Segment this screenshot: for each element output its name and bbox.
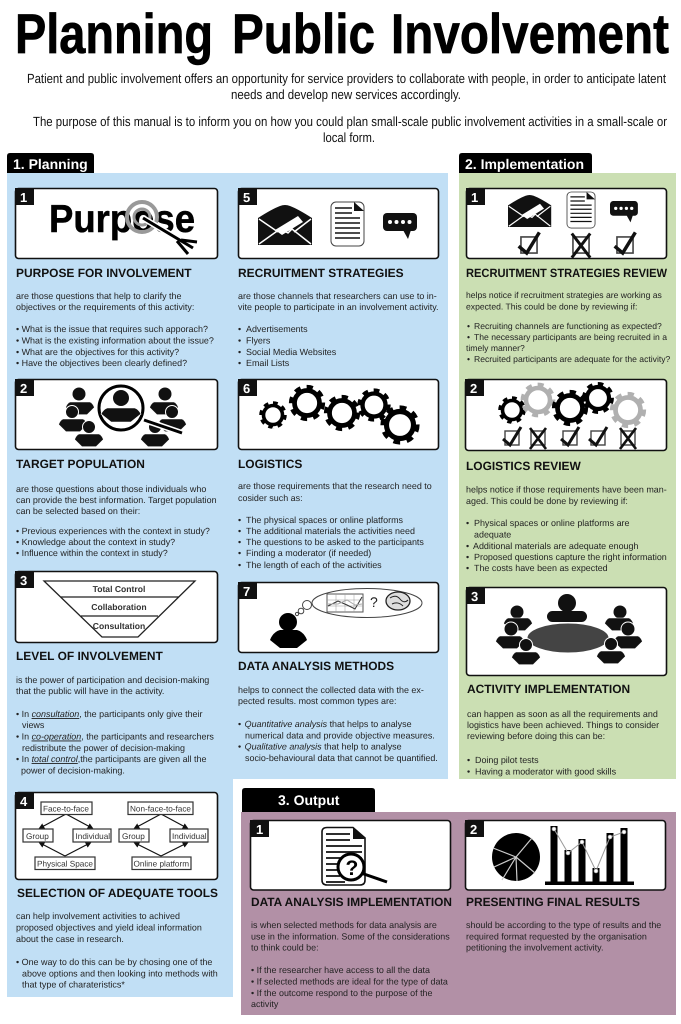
heading tab: 1. Planning <box>7 153 94 173</box>
section: data analysis methods: DATA ANALYSIS METHODS <box>238 659 394 673</box>
section: logistics review: Additional materials are adequate enough <box>473 541 638 551</box>
icon: people under magnifier <box>59 386 186 447</box>
heading tab: 3. Output <box>242 788 375 812</box>
section: target population: TARGET POPULATION <box>16 457 145 471</box>
intro text: needs and develop new services accordingly. <box>231 87 461 102</box>
section: presenting final results <box>465 820 666 952</box>
icon: recruitment channels with check marks <box>508 192 638 258</box>
diagram: tool options: Online platform <box>134 860 189 868</box>
icon: purpose target and dart: Purpose <box>49 198 195 241</box>
section: level of involvement: • In co-operation, the participants and researchers <box>16 732 214 742</box>
section: recruitment strategies: Advertisements <box>246 324 308 334</box>
section: data analysis methods: socio-behavioural data that cannot be quantified. <box>245 753 438 763</box>
section: recruitment strategies review: expected. This could be done by reviewing if: <box>466 302 637 312</box>
heading tab: 3. Output: 3. Output <box>278 792 340 808</box>
section: recruitment strategies: Email Lists <box>246 358 290 368</box>
section: recruitment strategies review: Recruited participants are adequate for the activity? <box>474 354 671 364</box>
title: Public <box>232 2 375 65</box>
section: logistics review: LOGISTICS REVIEW <box>466 459 581 473</box>
icon: involvement funnel: Total Control <box>93 584 145 594</box>
section: selection of adequate tools: above options and then looking into methods with <box>22 968 218 978</box>
icon: bar and line chart <box>545 826 634 885</box>
section: data analysis implementation: • If the researcher have access to all the data <box>251 965 430 975</box>
section: data analysis implementation: • If selected methods are ideal for the type of data <box>251 976 448 986</box>
section: recruitment strategies review: 1 <box>471 190 478 205</box>
section: activity implementation: Doing pilot tests <box>475 755 539 765</box>
section: logistics review: Proposed questions capture the right information <box>474 552 667 562</box>
section: activity implementation: reviewing before doing this can be: <box>467 731 605 741</box>
intro text: local form. <box>323 130 375 145</box>
section: level of involvement: • In total control,the participants are given all the <box>16 754 206 764</box>
section: recruitment strategies: Social Media Websites <box>246 347 337 357</box>
section: target population: can provide the best information. Target population <box>16 495 217 505</box>
section: logistics review: • <box>466 541 469 551</box>
section: logistics: • <box>238 526 241 536</box>
section: purpose for involvement <box>15 188 218 368</box>
icon: envelope <box>258 205 312 245</box>
section: activity implementation: Having a moderator with good skills <box>475 766 617 776</box>
section: recruitment strategies: vite people to participate in an involvement activity. <box>238 302 439 312</box>
section: target population: can be selected based on their: <box>16 506 140 516</box>
section: recruitment strategies review: Recruiting channels are functioning as expected? <box>474 321 662 331</box>
panel: planning background <box>7 173 448 997</box>
section: recruitment strategies review: The necessary participants are being recruited in a <box>474 332 667 342</box>
section: recruitment strategies: are those channels that researchers can use to in- <box>238 291 437 301</box>
title: Planning <box>15 2 213 65</box>
section: activity implementation: • <box>467 766 470 776</box>
section: target population: • Influence within the context in study? <box>16 548 168 558</box>
icon: document with magnifier <box>322 828 387 885</box>
section: recruitment strategies: 5 <box>243 190 250 205</box>
section: logistics: The physical spaces or online platforms <box>246 515 404 525</box>
section: activity implementation <box>466 587 666 776</box>
section: presenting final results: required format requested by the organisation <box>466 932 647 942</box>
section: logistics: The length of each of the activities <box>246 560 382 570</box>
section: recruitment strategies review: • <box>467 354 470 364</box>
section: purpose for involvement: • What are the objectives for this activity? <box>16 347 179 357</box>
diagram: tool options: Physical Space <box>37 860 93 868</box>
section: purpose for involvement: objectives or the requirements of this activity: <box>16 302 194 312</box>
section: recruitment strategies review: • <box>467 332 470 342</box>
section: data analysis implementation: use in the information. Some of the considerations <box>251 932 450 942</box>
section: selection of adequate tools <box>15 792 218 990</box>
section: presenting final results: should be according to the type of results and the <box>466 920 661 930</box>
heading tab: 2. Implementation: 2. Implementation <box>465 156 584 172</box>
section: presenting final results: petitioning the involvement activity. <box>466 942 603 952</box>
diagram: tool options: Group <box>26 832 49 841</box>
section: data analysis methods: helps to connect the collected data with the ex- <box>238 685 424 695</box>
diagram: tool options: Individual <box>76 832 110 841</box>
section: logistics: • <box>238 515 241 525</box>
icon: gears <box>261 388 417 442</box>
diagram: tool options: Non-face-to-face <box>130 804 191 814</box>
section: target population: are those questions about those individuals who <box>16 484 206 494</box>
section: logistics: The additional materials the activities need <box>246 526 415 536</box>
section: activity implementation: • <box>467 755 470 765</box>
section: selection of adequate tools: proposed objectives and yield ideal information <box>16 922 202 932</box>
section: logistics review: • <box>466 552 469 562</box>
section: recruitment strategies review: • <box>467 321 470 331</box>
section: activity implementation: can happen as soon as all the requirements and <box>467 709 658 719</box>
icon: flyer document <box>331 202 364 246</box>
section: data analysis implementation: DATA ANALYSIS IMPLEMENTATION <box>251 895 452 909</box>
section: data analysis methods <box>238 582 438 763</box>
section: recruitment strategies: • <box>238 347 241 357</box>
section: logistics: • <box>238 560 241 570</box>
section: purpose for involvement: • Have the objectives been clearly defined? <box>16 358 187 368</box>
section: recruitment strategies: • <box>238 336 241 346</box>
section: recruitment strategies: RECRUITMENT STRATEGIES <box>238 266 404 280</box>
section: logistics: Finding a moderator (if needed) <box>246 548 371 558</box>
section: logistics review: 2 <box>470 381 477 396</box>
section: activity implementation: logistics have been achieved. Things to consider <box>467 720 659 730</box>
section: selection of adequate tools: 4 <box>20 794 28 809</box>
section: logistics review: adequate <box>474 530 511 540</box>
icon: people around table <box>496 594 642 665</box>
section: data analysis methods: pected results. most common types are: <box>238 696 396 706</box>
section: selection of adequate tools: can help involvement activities to achived <box>16 911 180 921</box>
section: data analysis implementation: is when selected methods for data analysis are <box>251 920 437 930</box>
section: logistics: The questions to be asked to the participants <box>246 537 424 547</box>
icon: chat bubble <box>383 213 417 239</box>
section: logistics review <box>465 379 667 573</box>
section: recruitment strategies review: timely manner? <box>466 343 525 353</box>
diagram: tool options: Group <box>122 832 145 841</box>
section: recruitment strategies: Flyers <box>246 336 271 346</box>
section: activity implementation: ACTIVITY IMPLEMENTATION <box>467 682 630 696</box>
section: logistics review: The costs have been as expected <box>474 563 608 573</box>
section: logistics review: Physical spaces or online platforms are <box>474 518 630 528</box>
section: selection of adequate tools: SELECTION OF ADEQUATE TOOLS <box>17 886 218 900</box>
section: recruitment strategies review: helps notice if recruitment strategies are working as <box>466 290 662 300</box>
section: recruitment strategies: • <box>238 358 241 368</box>
section: target population <box>15 379 218 558</box>
intro text <box>27 71 667 145</box>
section: data analysis implementation <box>250 820 452 1009</box>
section: recruitment strategies: • <box>238 324 241 334</box>
icon: pie chart <box>492 833 540 881</box>
section: data analysis methods: • Quantitative analysis that helps to analyse <box>238 719 412 729</box>
section: logistics: • <box>238 548 241 558</box>
section: level of involvement: views <box>22 720 45 730</box>
section: data analysis implementation: activity <box>251 999 279 1009</box>
section: target population: • Previous experiences with the context in study? <box>16 526 210 536</box>
diagram: tool options <box>23 802 208 870</box>
section: logistics review: • <box>466 518 469 528</box>
section: logistics <box>238 379 438 570</box>
section: recruitment strategies review: RECRUITMENT STRATEGIES REVIEW <box>466 266 668 280</box>
diagram: tool options: Face-to-face <box>43 804 89 814</box>
panel: output background <box>241 812 676 1015</box>
section: data analysis implementation: to think could be: <box>251 942 319 952</box>
section: level of involvement: • In consultation, the participants only give their <box>16 709 202 719</box>
section: purpose for involvement: • What is the existing information about the issue? <box>16 336 214 346</box>
section: data analysis implementation: • If the outcome respond to the purpose of the <box>251 988 433 998</box>
section: level of involvement: LEVEL OF INVOLVEMENT <box>16 649 164 663</box>
icon: involvement funnel: Collaboration <box>91 602 147 612</box>
icon: gears with check marks <box>500 384 643 449</box>
section: recruitment strategies <box>238 188 439 368</box>
section: level of involvement <box>15 571 218 776</box>
panel: implementation background <box>459 173 676 779</box>
section: presenting final results: PRESENTING FINAL RESULTS <box>466 895 640 909</box>
icon: involvement funnel <box>44 581 195 637</box>
section: activity implementation: 3 <box>471 589 478 604</box>
section: logistics: 6 <box>243 381 250 396</box>
section: selection of adequate tools: about the case in research. <box>16 934 124 944</box>
section: presenting final results: 2 <box>470 822 477 837</box>
section: logistics: • <box>238 537 241 547</box>
section: logistics review: helps notice if those requirements have been man- <box>466 484 667 494</box>
section: logistics: cosider such as: <box>238 493 303 503</box>
section: logistics: LOGISTICS <box>238 457 302 471</box>
section: recruitment strategies review <box>466 188 671 364</box>
section: level of involvement: is the power of participation and decision-making <box>16 675 209 685</box>
section: level of involvement: that the public will have in the activity. <box>16 686 164 696</box>
section: selection of adequate tools: that type of charateristics* <box>22 980 125 990</box>
section: target population: • Knowledge about the context in study? <box>16 537 175 547</box>
section: data analysis implementation: 1 <box>256 822 263 837</box>
section: data analysis methods: 7 <box>243 584 250 599</box>
section: data analysis methods: numerical data and provide objective measures. <box>245 730 435 740</box>
section: logistics review: • <box>466 563 469 573</box>
section: level of involvement: redistribute the power of decision-making <box>22 743 185 753</box>
icon: thinking person with chart and brain: ? <box>370 594 378 610</box>
section: selection of adequate tools: • One way to do this can be by chosing one of the <box>16 957 212 967</box>
section: target population: 2 <box>20 381 27 396</box>
section: purpose for involvement: • What is the issue that requires such apporach? <box>16 324 208 334</box>
section: data analysis methods: • Qualitative analysis that help to analyse <box>238 742 402 752</box>
section: logistics review: aged. This could be done by reviewing if: <box>466 496 628 506</box>
heading tab: 1. Planning: 1. Planning <box>13 156 88 172</box>
section: level of involvement: 3 <box>20 573 27 588</box>
section: purpose for involvement: 1 <box>20 190 27 205</box>
section: purpose for involvement: PURPOSE FOR INVOLVEMENT <box>16 266 192 280</box>
icon: involvement funnel: Consultation <box>93 621 145 631</box>
section: purpose for involvement: are those questions that help to clarify the <box>16 291 181 301</box>
icon: document with magnifier: ? <box>346 857 358 880</box>
title <box>15 2 669 65</box>
section: level of involvement: power of decision-making. <box>21 766 125 776</box>
diagram: tool options: Individual <box>172 832 207 841</box>
section: logistics: are those requirements that the research need to <box>238 481 432 491</box>
icon: thinking person with chart and brain <box>270 588 422 648</box>
